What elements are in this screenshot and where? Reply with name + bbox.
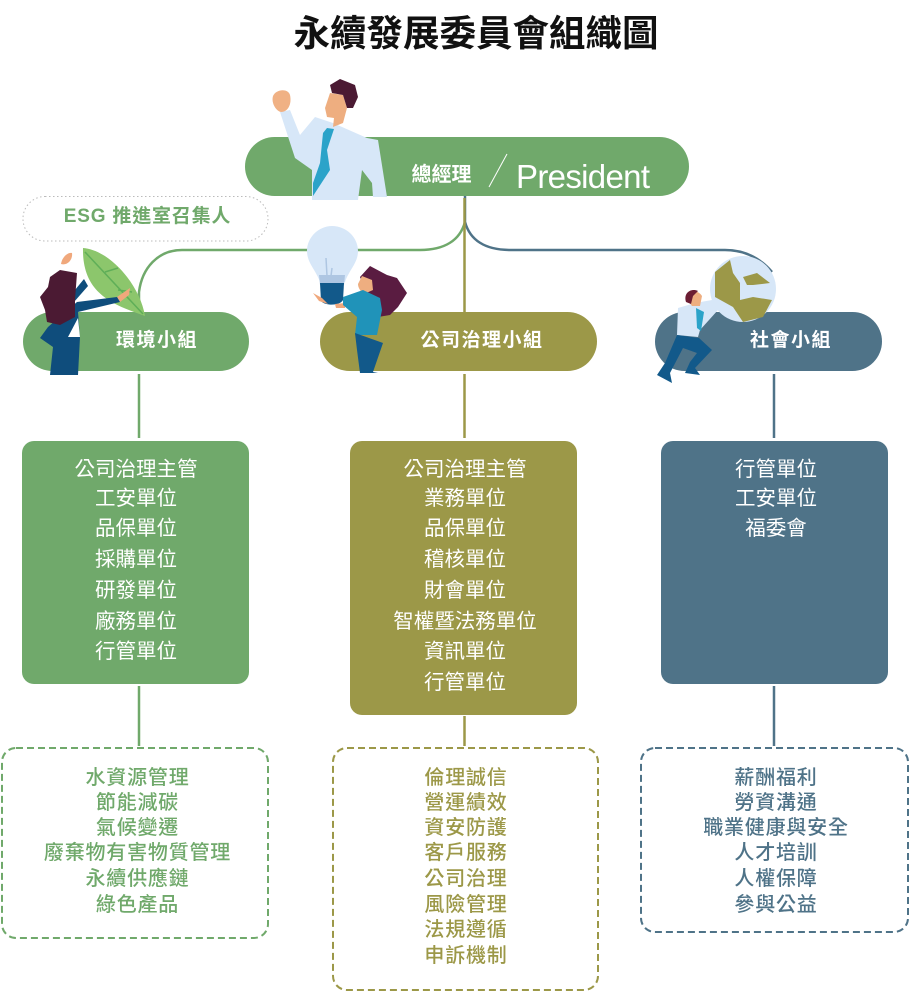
panel: environment units: 公司治理主管 xyxy=(74,458,198,481)
icon: globe with man xyxy=(657,256,776,383)
title: 永續發展委員會組織圖 xyxy=(294,13,658,54)
icon: president figure xyxy=(273,79,387,200)
panel: environment topics: 節能減碳 xyxy=(96,791,179,814)
panel: social topics: 職業健康與安全 xyxy=(703,816,849,839)
panel: governance topics: 客戶服務 xyxy=(424,841,508,864)
panel: environment units: 工安單位 xyxy=(95,487,177,510)
president pill xyxy=(245,137,689,196)
panel: governance topics: 營運績效 xyxy=(424,791,508,814)
panel: governance units: 行管單位 xyxy=(424,671,506,694)
panel: governance topics: 倫理誠信 xyxy=(424,766,508,789)
panel: governance topics: 風險管理 xyxy=(424,893,508,916)
panel: governance topics: 申訴機制 xyxy=(424,944,508,967)
panel: governance topics: 公司治理 xyxy=(424,867,508,890)
panel: environment units: 廠務單位 xyxy=(95,609,177,633)
panel: environment units xyxy=(22,441,249,684)
panel: governance units: 稽核單位 xyxy=(424,548,506,571)
panel: environment units: 採購單位 xyxy=(95,548,177,571)
panel: social topics xyxy=(641,748,908,932)
panel: governance units: 業務單位 xyxy=(424,487,506,510)
panel: governance units: 公司治理主管 xyxy=(404,458,526,481)
panel: environment topics: 永續供應鏈 xyxy=(86,866,190,890)
connector lines: unit boxes to topics xyxy=(139,686,774,746)
icon: leaf with woman xyxy=(40,248,145,375)
panel: environment topics: 綠色產品 xyxy=(96,893,179,916)
panel: social topics: 勞資溝通 xyxy=(734,791,818,814)
panel: social topics: 人權保障 xyxy=(734,867,818,890)
panel: governance units: 品保單位 xyxy=(424,517,506,540)
president pill: 總經理 xyxy=(412,162,472,186)
icon: light bulb with woman xyxy=(307,226,407,373)
group pill: environment xyxy=(23,312,249,371)
panel: social units: 福委會 xyxy=(745,517,807,540)
panel: social units xyxy=(661,441,888,684)
panel: governance topics: 資安防護 xyxy=(424,816,508,839)
panel: environment topics: 水資源管理 xyxy=(86,766,190,789)
panel: governance units xyxy=(350,441,577,715)
group pill: social xyxy=(655,312,882,371)
panel: governance topics xyxy=(333,748,598,990)
president pill: President xyxy=(516,158,650,195)
group pill: governance xyxy=(320,312,597,371)
group pill: governance: 公司治理小組 xyxy=(420,329,544,351)
panel: environment topics: 廢棄物有害物質管理 xyxy=(44,841,231,864)
panel: governance topics: 法規遵循 xyxy=(424,918,508,941)
panel: environment units: 品保單位 xyxy=(95,517,177,540)
group pill: environment: 環境小組 xyxy=(116,328,198,351)
ESG convener label: ESG 推進室召集人 xyxy=(64,204,231,227)
connector lines from president to groups xyxy=(139,196,772,312)
panel: governance units: 智權暨法務單位 xyxy=(393,610,537,633)
ESG convener label xyxy=(23,196,268,241)
panel: social units: 工安單位 xyxy=(735,487,817,510)
panel: environment topics xyxy=(2,748,268,938)
panel: environment topics: 氣候變遷 xyxy=(96,816,179,839)
panel: social units: 行管單位 xyxy=(735,458,817,481)
panel: social topics: 參與公益 xyxy=(734,893,818,916)
panel: environment units: 行管單位 xyxy=(95,640,177,663)
group pill: social: 社會小組 xyxy=(750,328,832,351)
panel: social topics: 人才培訓 xyxy=(734,841,818,864)
panel: governance units: 財會單位 xyxy=(424,579,506,602)
connector lines: groups to unit boxes xyxy=(139,374,774,438)
panel: social topics: 薪酬福利 xyxy=(734,766,818,789)
panel: environment units: 研發單位 xyxy=(95,579,177,602)
panel: governance units: 資訊單位 xyxy=(424,640,506,663)
